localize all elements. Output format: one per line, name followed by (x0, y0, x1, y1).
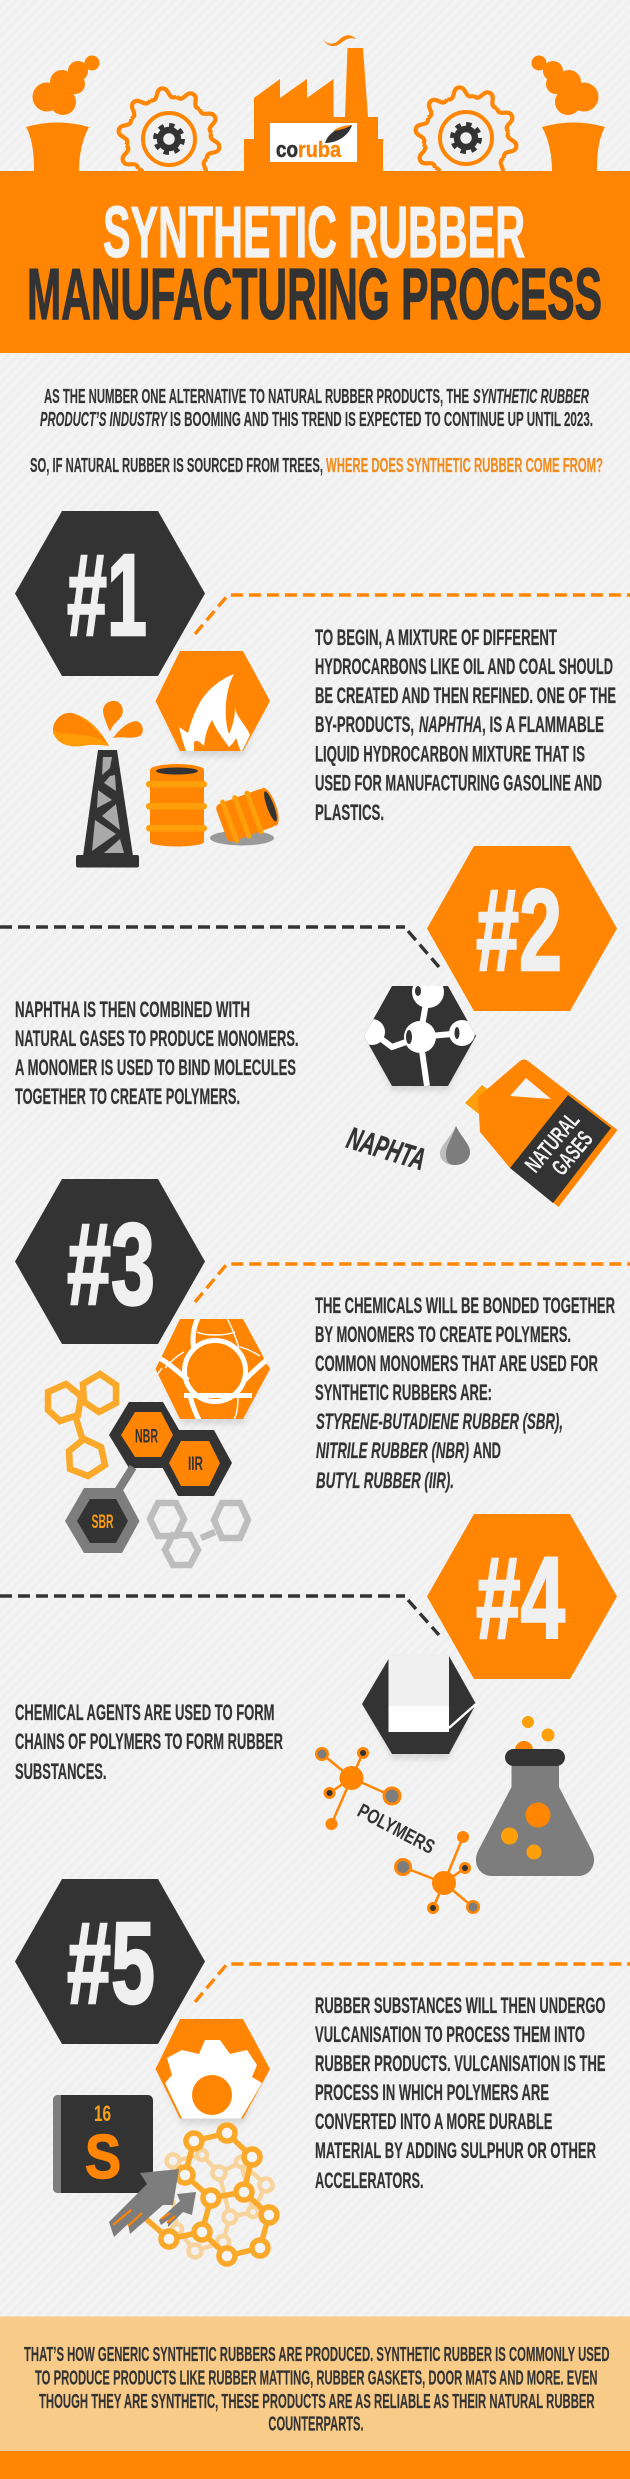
step 2 badge: #2 (476, 865, 562, 995)
step 3 text (315, 1293, 615, 1493)
illustration: natural gases jug: NATURAL (520, 1107, 584, 1177)
step 3 illustration: SBR hexagon: SBR (92, 1512, 114, 1533)
intro text: SO, IF NATURAL RUBBER IS SOURCED FROM TREES, (30, 454, 323, 477)
step 3 badge: #3 (67, 1199, 155, 1329)
step 4 illustration: lower polymer (394, 1831, 480, 1914)
step 5 badge (15, 1879, 205, 2044)
step 2 text: A MONOMER IS USED TO BIND MOLECULES (15, 1055, 296, 1080)
step 3 connector (195, 1264, 630, 1302)
step 3 illustration: IIR hexagon: IIR (188, 1454, 203, 1475)
step 2 text: TOGETHER TO CREATE POLYMERS. (15, 1084, 240, 1109)
header band (0, 171, 630, 353)
step 1 badge (15, 511, 205, 676)
footer bar (0, 2451, 630, 2479)
step 2 text (15, 997, 298, 1109)
step 2 connector (0, 927, 439, 967)
step 5 text: ACCELERATORS. (315, 2168, 424, 2193)
step 5 badge: #5 (67, 1898, 155, 2028)
step 3 illustration: NBR hexagon (109, 1402, 182, 1468)
step 1 icon: flame hexagon (156, 651, 270, 756)
step 4 illustration: flask (476, 1716, 594, 1876)
step 4 badge (427, 1514, 617, 1679)
icon: left gear (110, 81, 228, 197)
step 4 text: CHEMICAL AGENTS ARE USED TO FORM (15, 1700, 274, 1725)
step 3 illustration: IIR hexagon (160, 1430, 232, 1496)
step 1 text (315, 625, 616, 825)
illustration: left cooling tower with smoke (26, 56, 100, 172)
step 4 text (15, 1700, 283, 1784)
step 2 text: NATURAL GASES TO PRODUCE MONOMERS. (15, 1026, 298, 1051)
step 2 text: NAPHTHA IS THEN COMBINED WITH (15, 997, 250, 1022)
step 3 illustration: SBR hexagon (65, 1467, 140, 1553)
illustration: natural gases jug (465, 1060, 618, 1207)
step 5 text (315, 1993, 606, 2193)
illustration: factory with logo: ruba (298, 137, 342, 162)
step 2 badge (427, 846, 617, 1011)
step 1 illustration: fallen barrel (210, 783, 284, 846)
step 1 text: PLASTICS. (315, 800, 384, 825)
label: naphta: NAPHTA (343, 1120, 430, 1177)
step 5 illustration: sulphur element tile: S (85, 2123, 121, 2192)
icon: naphtha drop (440, 1126, 470, 1165)
step 3 badge (15, 1179, 205, 1344)
step 3 text: AND (473, 1438, 501, 1463)
illustration: natural gases jug: GASES (546, 1126, 598, 1180)
intro text: PRODUCT’S INDUSTRY (40, 408, 168, 431)
step 5 illustration: sulphur element tile: 16 (94, 2101, 111, 2126)
step 3 text: NITRILE RUBBER (NBR) (316, 1438, 469, 1463)
step 4 icon: beaker hexagon (362, 1654, 476, 1759)
step 3 illustration: orange outline hexagons (48, 1374, 116, 1476)
step 5 illustration: sulphur element tile (53, 2095, 153, 2193)
step 3 illustration: grey outline hexagons (150, 1503, 248, 1565)
illustration: right cooling tower with smoke (532, 56, 605, 172)
step 3 text: BUTYL RUBBER (IIR). (316, 1468, 454, 1493)
step 1 illustration: upright barrel (146, 764, 207, 846)
step 4 text: SUBSTANCES. (15, 1759, 106, 1784)
step 4 badge: #4 (476, 1533, 565, 1663)
icon: right gear (407, 80, 525, 196)
step 5 icon: gear hexagon (156, 2019, 270, 2124)
step 2 icon: molecule hexagon (364, 986, 476, 1092)
label: polymers: POLYMERS (354, 1800, 438, 1859)
intro text (30, 385, 603, 477)
step 3 text: SYNTHETIC RUBBERS ARE: (315, 1380, 492, 1405)
step 1 connector (195, 595, 630, 634)
step 5 illustration: rubber molecular network (145, 2125, 277, 2264)
step 4 text: CHAINS OF POLYMERS TO FORM RUBBER (15, 1729, 283, 1754)
title (27, 193, 602, 335)
step 4 illustration: upper polymer (315, 1747, 402, 1830)
footer panel: COUNTERPARTS. (268, 2412, 364, 2435)
step 3 icon: atom hexagon (156, 1318, 270, 1424)
step 1 illustration: oil derrick with splash (53, 701, 143, 868)
illustration: factory with logo: co (276, 137, 298, 162)
step 4 connector (0, 1596, 439, 1635)
footer panel (0, 2316, 630, 2451)
step 1 text: NAPHTHA (419, 712, 482, 737)
step 5 illustration: arrows (109, 2169, 196, 2237)
illustration: factory with logo (244, 35, 383, 172)
step 1 badge: #1 (67, 530, 147, 660)
step 1 text: BY-PRODUCTS, (315, 712, 414, 737)
step 3 illustration: NBR hexagon: NBR (135, 1426, 158, 1448)
step 5 connector (195, 1964, 630, 2002)
